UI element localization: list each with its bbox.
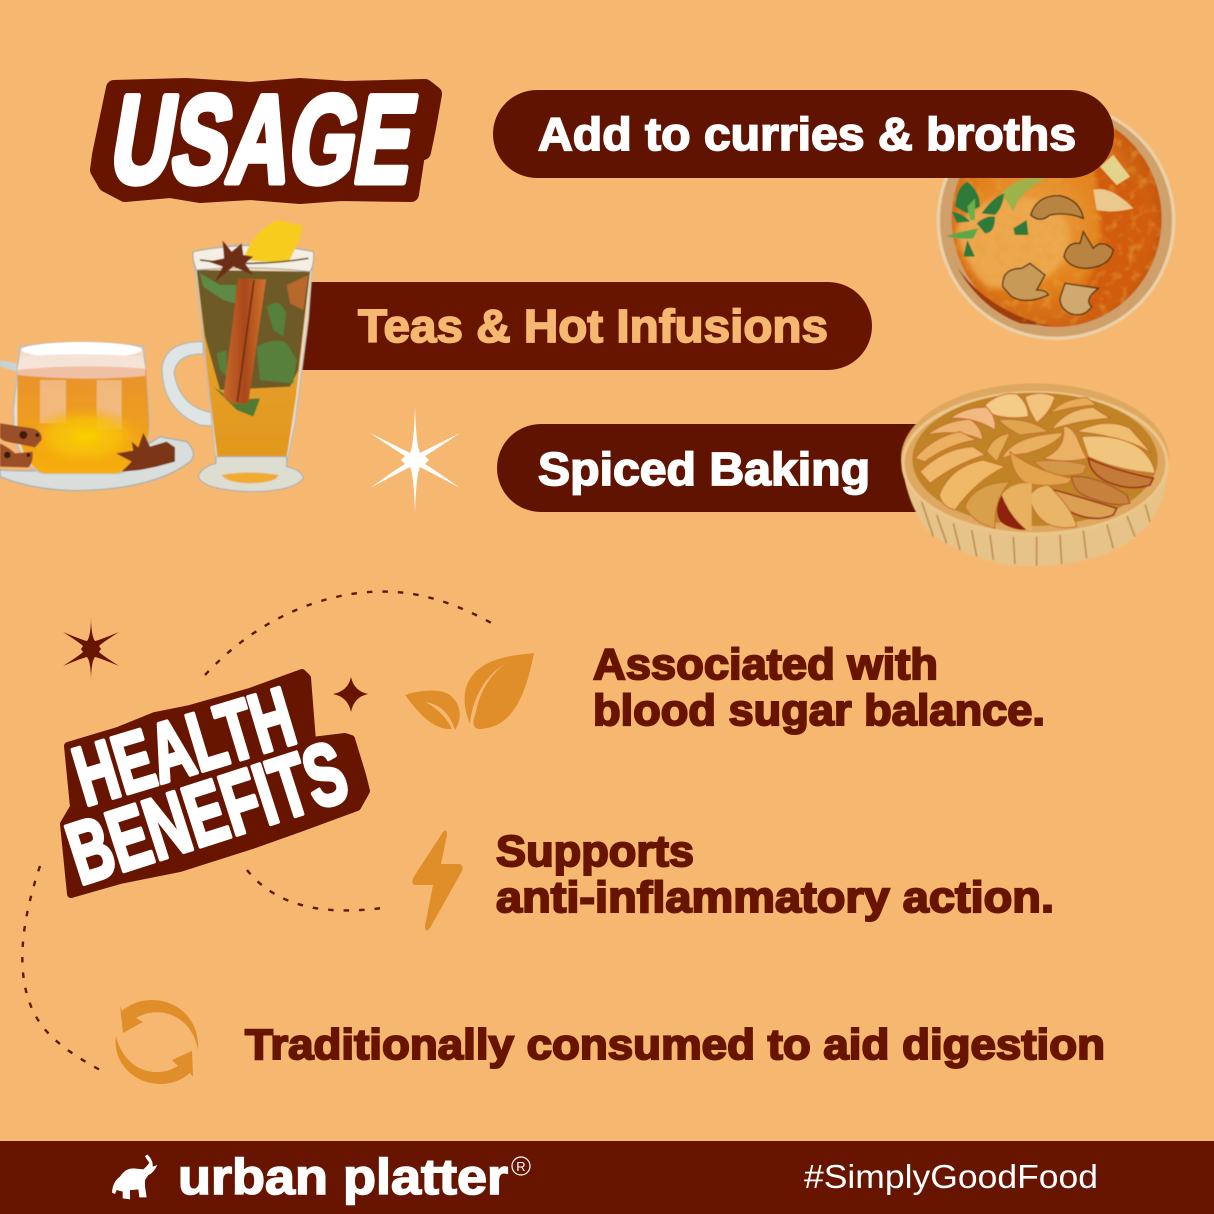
pill: spiced baking: [497, 424, 930, 512]
dashed arc: lower: [247, 870, 382, 910]
icon: cycle arrows: [116, 1000, 198, 1084]
pill: spiced baking: Spiced Baking: [538, 443, 870, 495]
cinnamon stick: [223, 278, 266, 404]
dashed arc: top: [205, 592, 495, 675]
dashed arc: left: [22, 866, 102, 1071]
mushrooms: [1003, 196, 1113, 315]
pill: teas & hot infusions: [290, 282, 872, 370]
pill: teas & hot infusions: Teas & Hot Infusions: [358, 300, 828, 352]
icon: leaves: [405, 653, 534, 730]
heading: health benefits: BENEFITS: [56, 723, 358, 903]
hashtag: #SimplyGoodFood: [804, 1158, 1098, 1195]
icon: elephant logo: [112, 1155, 157, 1199]
icon: dark sparkle: [63, 616, 119, 682]
icon: small diamond star: [333, 677, 368, 712]
text: blood sugar benefit: Associated with: [593, 641, 938, 689]
pill: add to curries & broths: Add to curries & broths: [538, 108, 1076, 160]
icon: lightning bolt: [412, 831, 463, 931]
star anise: [208, 241, 253, 282]
text: anti-inflammatory benefit: anti-inflammatory action.: [496, 874, 1054, 922]
photo: tea cup with saucer: [0, 342, 193, 491]
star anise: [116, 433, 175, 472]
pill: add to curries & broths: [493, 90, 1114, 178]
heading: health benefits: [56, 670, 366, 903]
heading: usage: USAGE: [103, 71, 426, 209]
icon: white sparkle: [370, 406, 460, 514]
heading: health benefits: HEALTH: [63, 670, 305, 823]
photo: apple tart: [901, 383, 1169, 566]
registered mark: [512, 1157, 530, 1175]
logo wordmark: urban platter: [178, 1149, 508, 1205]
text: anti-inflammatory benefit: Supports: [496, 828, 694, 876]
registered mark: R: [516, 1159, 526, 1174]
footer band: [0, 1141, 1214, 1214]
cinnamon sticks: [0, 423, 42, 467]
photo: glass with spices: [162, 220, 314, 492]
text: digestion benefit: Traditionally consumed to aid digestion: [245, 1022, 1105, 1069]
photo: soup bowl: [937, 102, 1175, 340]
text: blood sugar benefit: blood sugar balance.: [593, 687, 1045, 735]
